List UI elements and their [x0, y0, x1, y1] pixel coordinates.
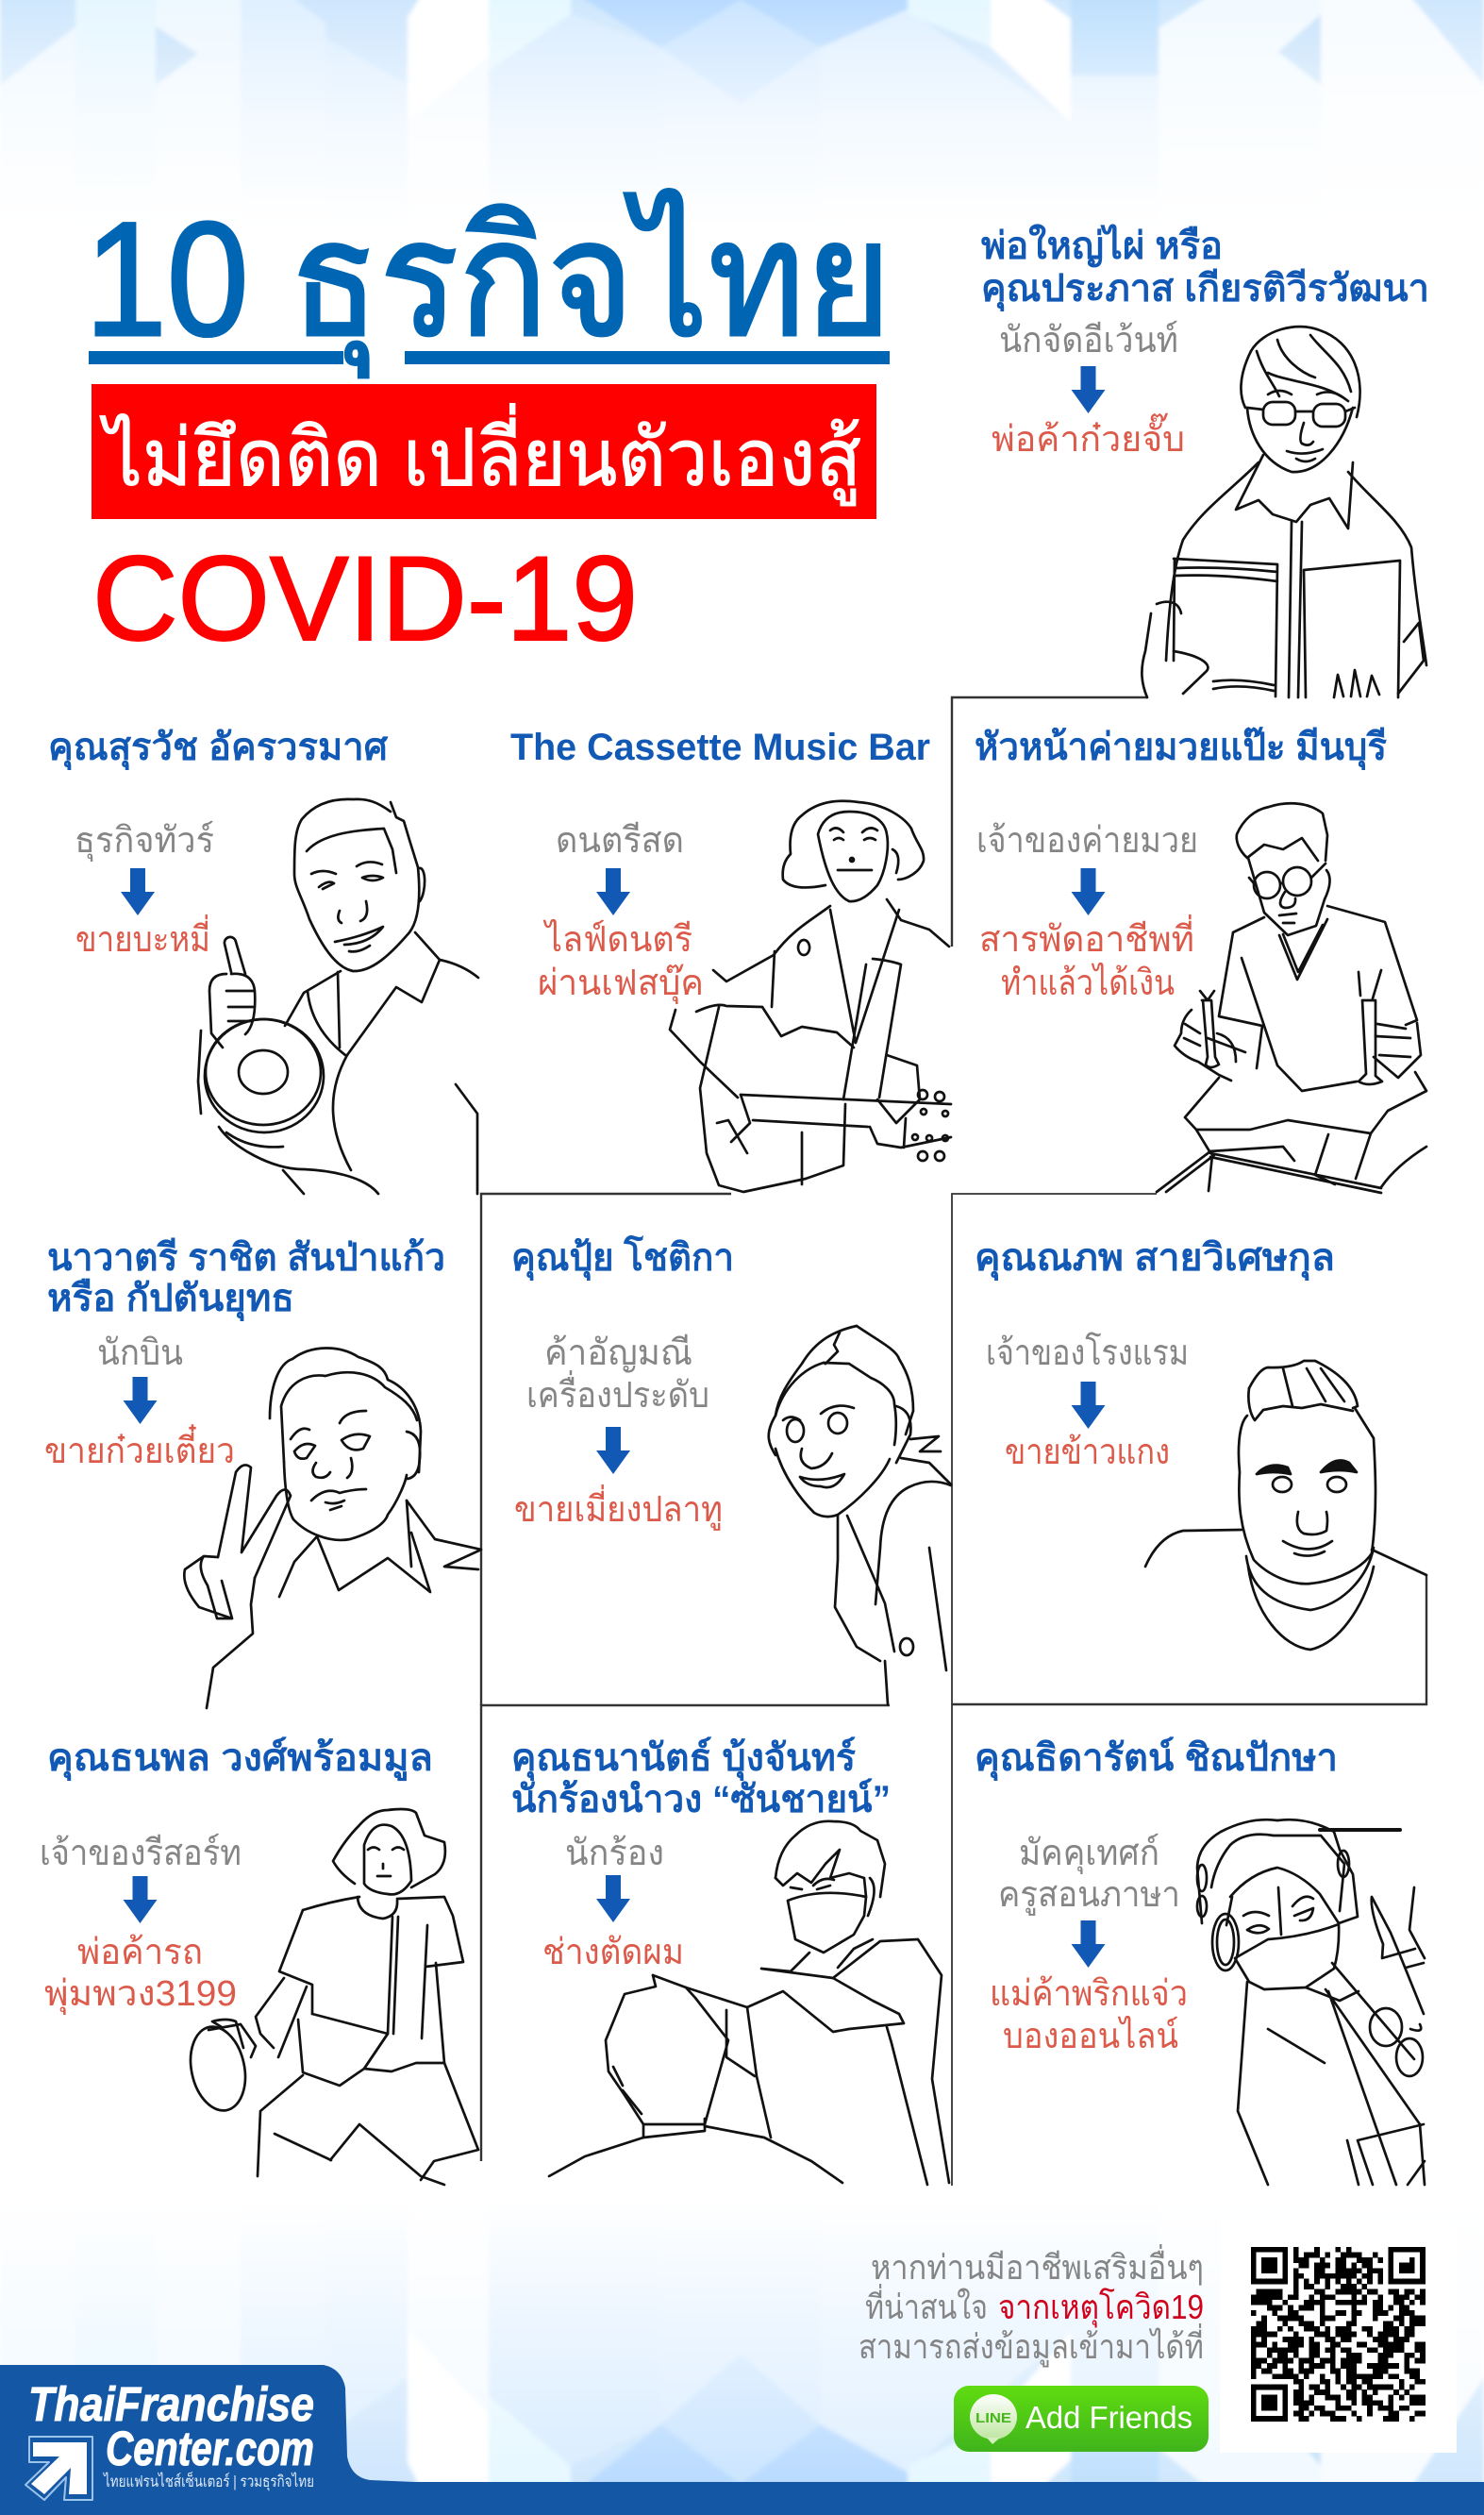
new job: ขายบะหมี่ [75, 914, 210, 960]
panel: The Cassette Music Bar [510, 727, 951, 1192]
arrow [123, 1377, 157, 1424]
new job: สารพัดอาชีพที่ [979, 914, 1194, 960]
name: คุณณภพ สายวิเศษกุล [975, 1237, 1335, 1282]
new job: พ่อค้าก๋วยจั๊บ [992, 413, 1185, 460]
former job: นักบิน [97, 1333, 183, 1373]
heading: COVID-19: COVID-19 [92, 531, 638, 665]
footer bar and logo plate [0, 2365, 1484, 2515]
logo: ThaiFranchise Center.com: ThaiFranchise [28, 2377, 314, 2431]
panel: Khun Napop [975, 1237, 1426, 1650]
name: นาวาตรี ราชิต สันป่าแก้ว [47, 1237, 445, 1279]
portrait: man with bucket hat and megaphone [183, 1809, 478, 2185]
title: 10 businesses: 10 ธุรกิจไทย [85, 189, 892, 377]
panel: Thananat [511, 1736, 949, 2185]
new job: ขายข้าวแกง [1005, 1433, 1170, 1472]
former job: ธุรกิจทัวร์ [75, 820, 214, 862]
arrow [121, 868, 155, 915]
new job line 2: บองออนไลน์ [1003, 2016, 1178, 2056]
arrow [1072, 1382, 1106, 1429]
former job: เจ้าของโรงแรม [986, 1332, 1189, 1373]
footer: contact text: จากเหตุโควิด19 [998, 2288, 1204, 2328]
former job: นักจัดอีเว้นท์ [999, 320, 1178, 360]
logo: ThaiFranchise Center.com: Center.com [106, 2422, 314, 2475]
panel: Surawat [48, 727, 478, 1194]
button: LINE Add Friends: Add Friends [1025, 2400, 1192, 2435]
name: คุณสุรวัช อัครวรมาศ [48, 727, 389, 771]
portrait: woman with hair tied back [769, 1326, 951, 1704]
panel: Thanapol [40, 1736, 478, 2185]
arrow [123, 1876, 157, 1923]
panel: Captain Yut [44, 1237, 481, 1708]
arrow [596, 1875, 630, 1922]
name line 2: นักร้องนำวง “ซันชายน์” [511, 1778, 891, 1820]
new job line 2: ทำแล้วได้เงิน [1001, 963, 1175, 1003]
footer: contact text [859, 2244, 1204, 2368]
name: คุณธนพล วงศ์พร้อมมูล [47, 1736, 433, 1782]
panel: Khun Pui [511, 1235, 951, 1704]
logo: ThaiFranchise Center.com: ไทยแฟรนไชส์เซ็นเตอร์ | รวมธุรกิจไทย [102, 2471, 314, 2491]
QR code [1220, 2218, 1457, 2453]
logo: ThaiFranchise Center.com [25, 2377, 314, 2500]
name: คุณธนานัตธ์ บุ้งจันทร์ [511, 1736, 856, 1782]
portrait: man with glasses holding a paper [1142, 327, 1426, 697]
name: พ่อใหญ่ไผ่ หรือ [981, 224, 1223, 268]
name line 2: หรือ กัปตันยุทธ [47, 1278, 294, 1322]
new job: ขายก๋วยเตี๋ยว [44, 1424, 235, 1471]
portrait: man showing peace sign [184, 1348, 481, 1708]
portrait: man with thumb up holding pan [198, 799, 478, 1194]
footer: contact text: สามารถส่งข้อมูลเข้ามาได้ที่ [859, 2323, 1204, 2368]
portrait: man with quiff [1145, 1361, 1426, 1650]
former job: ดนตรีสด [556, 821, 684, 861]
arrow [1072, 1920, 1106, 1968]
button: LINE Add Friends: LINE [975, 2410, 1011, 2426]
former job: มัคคุเทศก์ [1019, 1833, 1159, 1874]
stair panel divider lines [481, 697, 1426, 2186]
panel: Muay camp head [975, 727, 1426, 1193]
portrait: man with glasses holding shrimp [1157, 803, 1426, 1193]
name: หัวหน้าค่ายมวยแป๊ะ มีนบุรี [975, 727, 1387, 771]
former job: เจ้าของรีสอร์ท [40, 1833, 242, 1873]
name: The Cassette Music Bar [510, 727, 930, 768]
new job: พ่อค้ารถ [77, 1933, 203, 1972]
portrait: masked barber cutting hair [549, 1821, 949, 2185]
footer: contact text: ที่น่าสนใจ [865, 2284, 988, 2326]
arrow [1072, 868, 1106, 915]
new job: ไลฟ์ดนตรี [542, 919, 692, 960]
icon: logo arrow [25, 2437, 92, 2500]
subtitle banner [92, 384, 876, 519]
portrait: guitarist in a hat [670, 801, 951, 1192]
footer: contact text: หากท่านมีอาชีพเสริมอื่นๆ [871, 2244, 1204, 2287]
name: คุณปุ้ย โชติกา [511, 1235, 734, 1282]
new job line 2: ผ่านเฟสบุ๊ค [538, 964, 704, 1004]
new job: แม่ค้าพริกแจ่ว [990, 1974, 1188, 2014]
new job: ขายเมี่ยงปลาทู [514, 1484, 723, 1531]
former job line 2: เครื่องประดับ [526, 1370, 709, 1416]
panel: Thidarat [975, 1736, 1425, 2185]
former job: นักร้อง [565, 1834, 664, 1873]
new job: ช่างตัดผม [542, 1933, 684, 1972]
new job line 2: พุ่มพวง3199 [44, 1974, 237, 2015]
arrow [1072, 366, 1106, 413]
former job: ค้าอัญมณี [544, 1333, 692, 1373]
arrow [596, 1427, 630, 1474]
former job line 2: ครูสอนภาษา [998, 1875, 1180, 1916]
portrait: masked woman with headphones and V sign [1197, 1819, 1425, 2185]
button: LINE Add Friends [954, 2386, 1209, 2452]
arrow [596, 868, 630, 915]
name line 2: คุณประภาส เกียรติวีรวัฒนา [981, 268, 1429, 312]
panel: Prakas [981, 224, 1429, 697]
name: คุณธิดารัตน์ ชิณปักษา [975, 1736, 1338, 1782]
subtitle banner: ไม่ยึดติด เปลี่ยนตัวเองสู้ [99, 403, 861, 506]
former job: เจ้าของค่ายมวย [976, 821, 1198, 861]
